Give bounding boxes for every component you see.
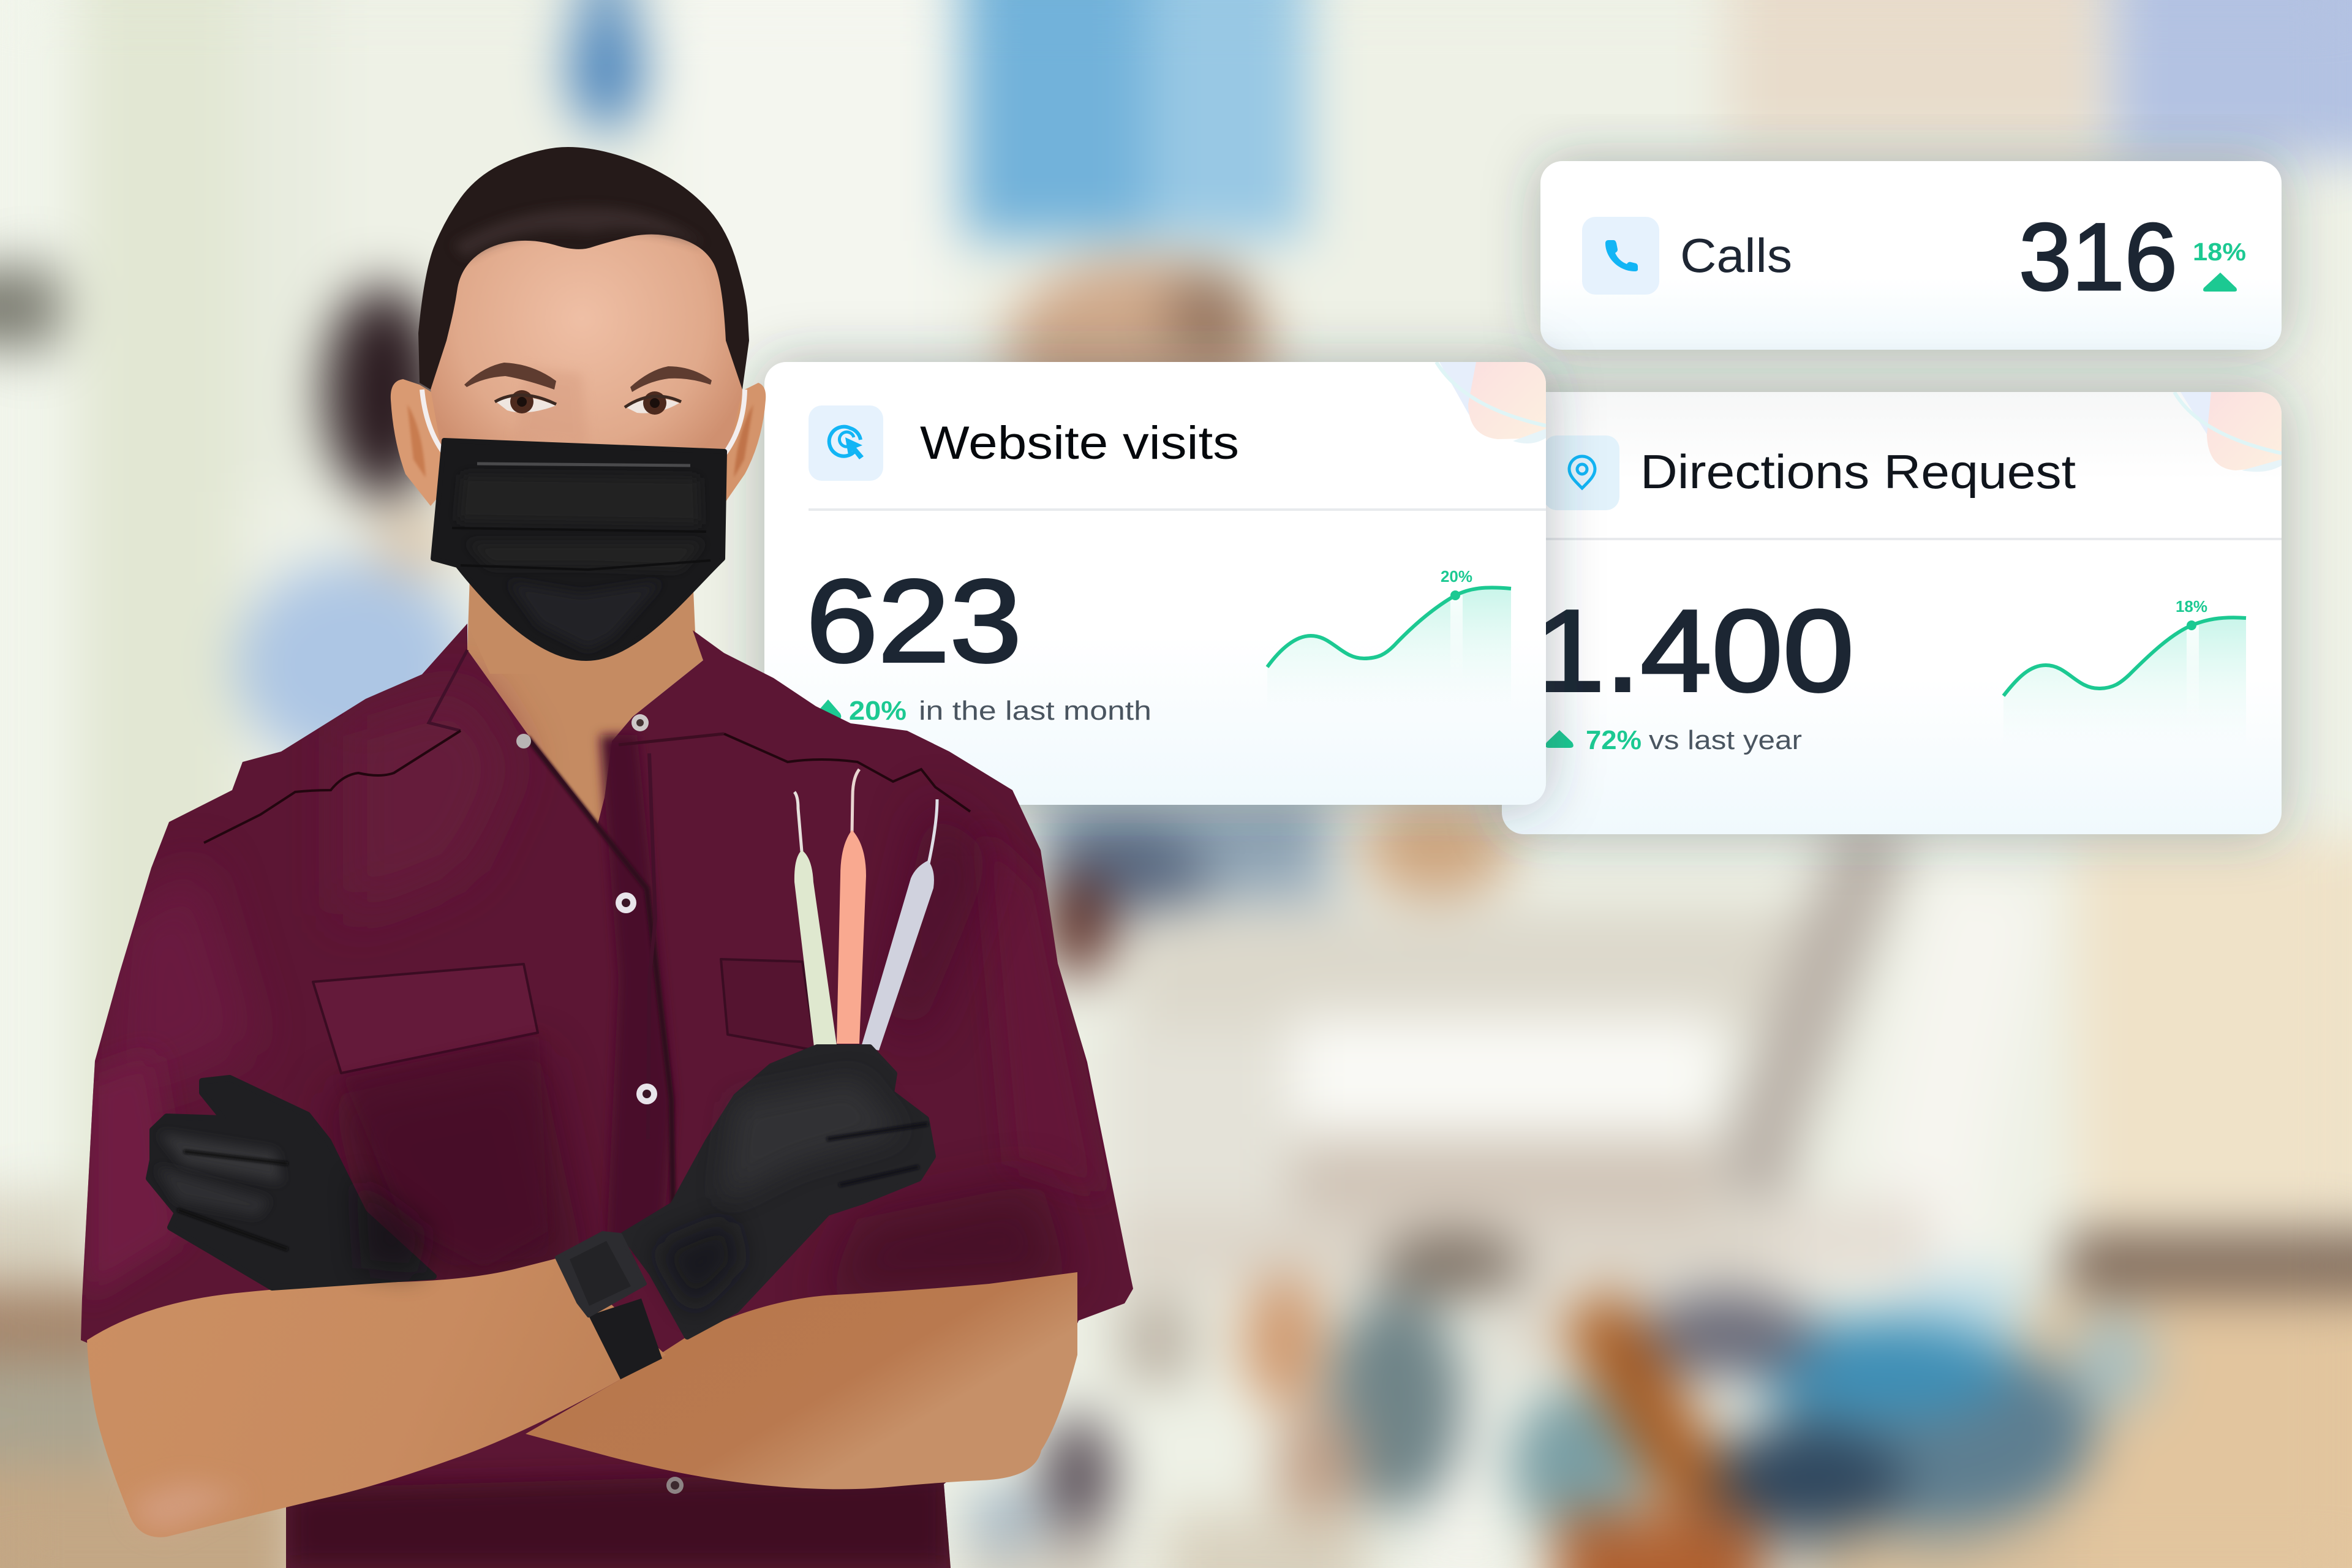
shirt buttons [516,714,684,1494]
directions request title: Directions Request [1640,445,2076,499]
line chart: website visits: 20% [1441,567,1472,586]
arm: viewer left [87,1257,666,1537]
left eye [495,390,556,413]
calls change percentage: 18% [2193,238,2246,266]
website visits title: Website visits [920,417,1239,469]
panel: calls card [1540,161,2282,350]
panel: website visits card [764,362,1546,805]
icon: location pin [1544,435,1619,510]
website visits change: 20% [849,696,907,726]
icon: cursor click [809,405,883,481]
glove: under arm [149,1078,434,1287]
hair [418,147,749,390]
directions comparison text: vs last year [1649,725,1802,755]
shirt shading [86,686,1102,1568]
right eye [625,391,681,415]
collar placket line [527,737,674,1250]
line chart: directions [2003,597,2246,749]
line chart: website visits [1267,567,1511,714]
decorative blobs [2174,392,2282,472]
left pocket panel [343,1035,548,1268]
icon: up triangle [1545,730,1574,748]
website visits comparison text: in the last month [919,696,1152,726]
calls label: Calls [1680,228,1792,282]
face [431,227,742,466]
dental tools [794,769,937,1050]
shoulder seam lines [204,731,461,843]
left pocket flap [313,964,538,1073]
glove: holding tools [624,1047,933,1336]
mask straps [422,390,444,453]
left ear [391,379,444,506]
head [391,147,766,658]
hair highlight [453,208,704,257]
elbow highlight [132,1482,245,1531]
right eyebrow [630,366,712,392]
left eyebrow [464,363,556,390]
shirt [81,624,1133,1568]
line chart: directions: 18% [2176,597,2207,616]
icon: phone [1582,217,1659,295]
directions value: 1.400 [1534,586,1854,716]
right ear [717,383,766,506]
neck [467,576,703,824]
decorative blobs [1436,362,1546,443]
directions change: 72% [1586,725,1642,755]
arm: viewer right [526,1272,1077,1489]
website visits value: 623 [806,555,1022,687]
face mask [433,440,725,658]
dentist figure [81,147,1133,1568]
icon: up triangle [815,699,841,719]
calls value: 316 [2019,204,2177,311]
right pocket flap [721,959,816,1050]
icon: up triangle [2203,273,2237,292]
panel: directions request card [1502,392,2282,834]
smartwatch [557,1233,662,1379]
